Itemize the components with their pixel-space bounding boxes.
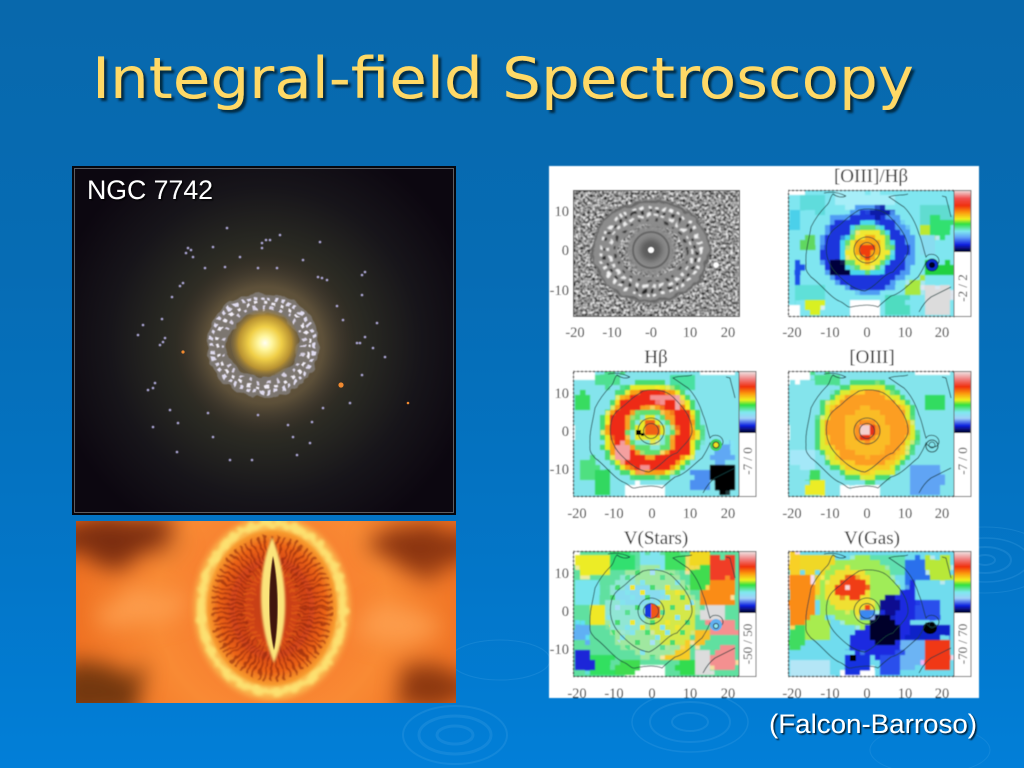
axis tick labels: 20 bbox=[721, 686, 735, 702]
map: V(Stars) bbox=[572, 550, 757, 678]
axis tick labels: 10 bbox=[683, 686, 697, 702]
panel: integral-field maps bbox=[549, 166, 979, 702]
colour scale bbox=[954, 190, 971, 316]
axis tick labels: 10 bbox=[898, 506, 912, 522]
colour scale: -2 / 2 bbox=[955, 274, 970, 302]
panel: integral-field maps: 10 bbox=[554, 566, 569, 582]
axis tick labels: -10 bbox=[604, 506, 624, 522]
orange foreground stars bbox=[181, 350, 409, 404]
map: grey unsharp image bbox=[573, 190, 740, 317]
credit: Falcon-Barroso: (Falcon-Barroso) bbox=[769, 709, 977, 739]
map titles: [OIII]/Hβ bbox=[834, 166, 908, 187]
colour scale bbox=[954, 372, 971, 496]
axis tick labels: -20 bbox=[782, 686, 802, 702]
axis tick labels: 0 bbox=[863, 325, 871, 341]
map: [OIII]/Hβ bbox=[787, 189, 972, 318]
axis tick labels bbox=[565, 325, 949, 702]
panel: integral-field maps: 0 bbox=[562, 243, 569, 259]
map: Hβ bbox=[572, 370, 757, 498]
axis tick labels: 20 bbox=[935, 686, 949, 702]
axis tick labels: 10 bbox=[898, 325, 912, 341]
panel: fiery eye image bbox=[76, 521, 456, 703]
map: [OIII] bbox=[787, 370, 972, 498]
map titles: V(Gas) bbox=[844, 528, 900, 549]
axis tick labels: 10 bbox=[898, 686, 912, 702]
axis tick labels: -20 bbox=[782, 325, 802, 341]
galaxy bulge bbox=[231, 309, 299, 377]
panel: integral-field maps: -10 bbox=[550, 462, 569, 478]
panel: integral-field maps: 0 bbox=[562, 424, 569, 440]
galaxy halo bbox=[173, 253, 357, 437]
dark cloud corners bbox=[76, 521, 456, 703]
decorative water ripples bbox=[403, 527, 1024, 768]
axis tick labels: -20 bbox=[565, 325, 585, 341]
axis tick labels: 20 bbox=[935, 506, 949, 522]
iris bbox=[194, 516, 350, 700]
star clusters bbox=[138, 228, 385, 460]
axis tick labels: 0 bbox=[648, 686, 656, 702]
panel: integral-field maps: -10 bbox=[550, 642, 569, 658]
axis tick labels: -20 bbox=[782, 506, 802, 522]
map titles: [OIII] bbox=[849, 347, 895, 368]
colour scale bbox=[739, 372, 756, 496]
map: V(Gas) bbox=[787, 550, 972, 678]
star-forming ring bbox=[211, 298, 315, 392]
label: NGC 7742: NGC 7742 bbox=[87, 175, 213, 205]
axis tick labels: 20 bbox=[935, 325, 949, 341]
axis tick labels: 0 bbox=[648, 506, 656, 522]
colour scale bbox=[954, 552, 971, 676]
axis tick labels: -20 bbox=[567, 686, 587, 702]
panel: integral-field maps: -10 bbox=[550, 283, 569, 299]
vertical pupil slit bbox=[261, 537, 285, 663]
colour scale bbox=[739, 552, 756, 676]
axis tick labels: -0 bbox=[645, 325, 657, 341]
panel: integral-field maps: 10 bbox=[554, 204, 569, 220]
colour scale: -7 / 0 bbox=[740, 447, 755, 475]
title: Integral-field Spectroscopy bbox=[92, 46, 914, 112]
axis tick labels: 0 bbox=[863, 506, 871, 522]
axis tick labels: -10 bbox=[604, 686, 624, 702]
axis tick labels: -10 bbox=[820, 686, 840, 702]
colour scale: -50 / 50 bbox=[740, 624, 755, 664]
axis tick labels: 0 bbox=[863, 686, 871, 702]
axis tick labels: -10 bbox=[820, 325, 840, 341]
axis tick labels: 20 bbox=[721, 325, 735, 341]
map titles bbox=[624, 166, 908, 549]
axis tick labels: 10 bbox=[683, 506, 697, 522]
map titles: Hβ bbox=[644, 347, 668, 368]
axis tick labels: -10 bbox=[602, 325, 622, 341]
map titles: V(Stars) bbox=[624, 528, 688, 549]
axis tick labels: -10 bbox=[820, 506, 840, 522]
axis tick labels: 20 bbox=[721, 506, 735, 522]
axis tick labels: -20 bbox=[567, 506, 587, 522]
colour scale: -7 / 0 bbox=[955, 447, 970, 475]
panel: integral-field maps: 10 bbox=[554, 386, 569, 402]
colour scale: -70 / 70 bbox=[955, 624, 970, 664]
panel: NGC 7742 galaxy photograph bbox=[72, 166, 456, 515]
axis tick labels: 10 bbox=[683, 325, 697, 341]
panel: integral-field maps: 0 bbox=[562, 604, 569, 620]
